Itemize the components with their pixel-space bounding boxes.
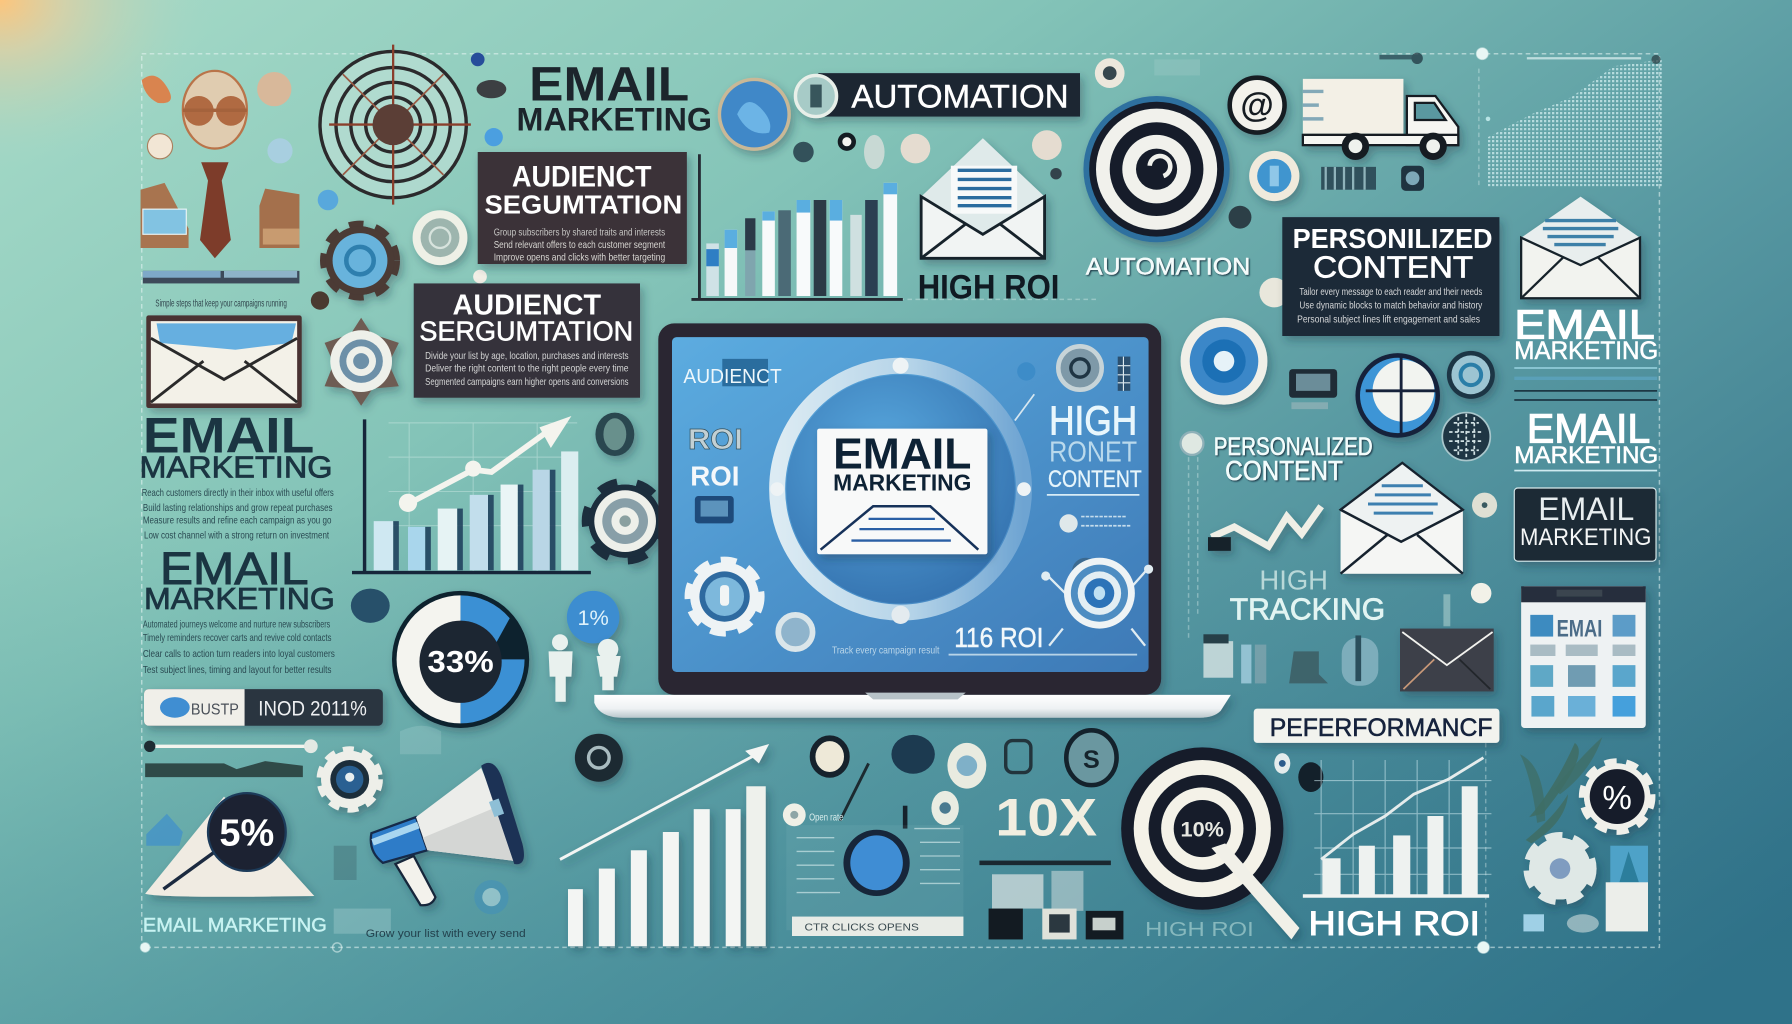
heading: email marketing left 1: EMAIL [143,407,314,464]
dashed frame [141,48,1659,953]
bar chart: growth left [352,416,591,573]
icon: big bullseye target [1083,96,1230,242]
text block: left description 2: Timely reminders recover carts and revive cold contacts [143,633,332,644]
icons: row above lens panel: S [1083,746,1100,774]
icon: businessman figure [141,71,299,258]
icon: plant leaves [1520,737,1602,843]
donut chart: 33 percent [392,591,529,728]
laptop base [594,695,1231,718]
icon: pale gear [1529,838,1591,899]
text block: left description 2: Test subject lines, timing and layout for better results [143,665,332,676]
icon: g ring [1447,351,1495,399]
screen: left labels: ROI [688,424,743,456]
panel: personalized content: Personal subject lines lift engagement and sales [1297,314,1480,325]
icons: dark square right of badge [1289,369,1337,409]
heading: email marketing top [517,59,712,137]
panel: audience segmentation 2: SERGUMTATION [419,316,633,347]
icon: brown gear badge [326,226,394,295]
icon: dark knob lower center [575,734,623,782]
label: high tracking [1230,565,1385,626]
screen: footer lines: Track every campaign result [832,646,940,657]
screen: roi text: 116 ROI [954,622,1043,653]
icons: small parts above envelope [793,58,1125,179]
icons: small decorations upper left [311,53,506,310]
icon: tall device [1443,594,1450,626]
panel: audience segmentation 1: SEGUMTATION [485,190,682,220]
heading: email marketing right 1: MARKETING [1514,337,1658,365]
icon: percent gear [1584,763,1650,830]
icon: dark gear right of chart [589,485,662,558]
heading: email marketing left 2 [144,543,335,616]
strip: left caption bar [143,271,299,309]
icon: small blue wave tag [146,814,183,846]
screen: left labels [683,359,782,523]
screen: right labels: RONET [1049,437,1137,469]
ghost label: high roi: HIGH ROI [1145,918,1254,941]
screen: left labels: ROI [690,461,739,492]
screen: pin marker [1017,362,1035,381]
screen: central ring [770,358,1031,624]
icon: gift box and blocks [1523,846,1648,933]
panel: audience segmentation 1 [478,152,687,264]
panel: audience segmentation 1: AUDIENCT [512,160,651,193]
card: email marketing: MARKETING [833,469,971,495]
calendar: email tiles: EMAI [1557,616,1602,643]
icon: blue percent badge [567,591,619,643]
icons: dots near line chart [1274,753,1323,792]
icons: pins near envelope [1471,493,1497,603]
icon: blue percent badge: 1% [577,605,609,630]
text block: left description 1 [142,488,334,541]
icons: white people figures [549,634,621,702]
text block: left description 1: Measure results and refine each campaign as you go [143,515,331,526]
screen: target icon [1041,558,1153,646]
card: email marketing: EMAIL [833,431,971,479]
panel: audience segmentation 1: Send relevant offers to each customer segment [494,240,665,251]
panel: lens report: CTR CLICKS OPENS [805,922,919,933]
laptop [594,323,1231,718]
panel: personalized content: PERSONILIZED [1293,223,1493,254]
pill: stat bar [144,689,383,726]
label: personalized content [1214,433,1373,486]
icon: spider web target [320,45,471,205]
banner: automation: AUTOMATION [851,78,1069,114]
panel: lens report [786,825,963,936]
donut chart: 33 percent: 33% [427,644,494,679]
icon: triangle envelope with 5 percent [145,793,314,897]
icon: percent gear: % [1602,780,1632,817]
icons: faint clusters near megaphone [334,726,509,934]
heading: email marketing left 2: EMAIL [160,543,309,594]
bar chart: bottom center [560,744,769,946]
icon: at sign badge [1230,78,1285,133]
text block: left description 1: Build lasting relationships and grow repeat purchases [143,503,333,514]
icon: delivery truck [1303,79,1458,160]
stat: 10x: 10X [995,788,1097,847]
pie icon: blue ring cross [1355,353,1440,438]
panel: personalized content: Use dynamic blocks to match behavior and history [1299,301,1482,312]
divider lines right [1514,368,1657,400]
panel: audience segmentation 1: Group subscribers by shared traits and interests [494,227,665,238]
banner: automation [795,73,1080,117]
heading: email marketing top: MARKETING [517,101,712,137]
label: high roi bottom: HIGH ROI [1309,905,1480,943]
screen: connector pin [1015,394,1034,421]
panel: email marketing dark: MARKETING [1520,524,1651,551]
screen: right labels: HIGH [1049,397,1137,443]
badge: blue ring right of laptop [1181,318,1267,405]
panel: audience segmentation 2: Deliver the right content to the right people every time [425,363,629,374]
heading: email marketing right 2: EMAIL [1527,405,1650,451]
label: personalized content: PERSONALIZED [1214,433,1373,461]
icon: envelope top right [1521,197,1640,298]
heading: email marketing right 2: MARKETING [1514,442,1658,469]
icon: dark orb left of donut [351,589,390,623]
icon: dark knob [595,413,634,456]
heading: email marketing right 1: EMAIL [1514,301,1655,347]
icon: silver seal [413,210,467,265]
card: email marketing [817,429,987,554]
label: automation small: AUTOMATION [1086,253,1250,280]
icon: triangle envelope with 5 percent: 5% [219,812,274,854]
line and bar chart: bottom right [1303,758,1491,896]
laptop screen [672,337,1149,672]
screen: left labels: AUDIENCT [683,365,782,388]
icons: row above lens panel [783,730,1117,829]
icon: globe [1442,413,1490,461]
panel: email marketing dark: EMAIL [1538,491,1634,527]
text block: left description 2: Clear calls to action turn readers into loyal customers [143,649,335,660]
icon: white gear [321,751,378,808]
small note bottom: Grow your list with every send [366,928,526,940]
icon: envelope center right [1341,463,1463,574]
icon: at sign badge: @ [1240,87,1274,125]
panel: audience segmentation 2 [414,283,640,398]
icon: envelope with letter top center [921,138,1045,258]
text block: left description 2 [143,619,335,676]
icons: pale tools row [1203,634,1378,686]
envelope left [146,315,302,408]
screen: gear icon [690,562,759,631]
icons: misc small near truck [1229,166,1424,307]
calendar: email tiles [1521,586,1646,728]
pill: performance: PEFERFORMANCF [1270,714,1493,742]
panel: audience segmentation 2: AUDIENCT [453,289,602,321]
screen: small ring [778,615,813,649]
text block: left description 1: Reach customers directly in their inbox with useful offers [142,488,334,499]
slider and strip [144,739,318,777]
label: high tracking: HIGH [1259,565,1328,596]
pill: stat bar: INOD 2011% [258,695,367,720]
screen: right labels: CONTENT [1048,466,1142,493]
text block: left description 2: Automated journeys welcome and nurture new subscribers [143,619,330,630]
heading: email marketing left 1: MARKETING [139,450,333,485]
panel: personalized content: CONTENT [1313,250,1473,285]
icon: dark envelope [1400,629,1494,691]
heading: email marketing top: EMAIL [529,59,689,112]
icon: zigzag arrow [1208,506,1321,551]
icon: bottom target with pointer: 10% [1181,817,1224,842]
icon: megaphone [371,763,524,905]
panel: personalized content [1282,217,1499,336]
screen: status lines [1059,514,1131,533]
label: high tracking: TRACKING [1230,591,1385,626]
strip: left caption bar: Simple steps that keep your campaigns running [155,298,287,309]
heading: email marketing left 1 [139,407,333,485]
panel: audience segmentation 1: Improve opens and clicks with better targeting [494,253,665,264]
pill: stat bar: BUSTP [191,701,239,718]
label: email marketing bottom left: EMAIL MARKETING [143,914,327,936]
bar chart: top [691,154,903,299]
icon: small pin dot [1181,432,1203,455]
icon: bottom target with pointer [1121,747,1299,939]
heading: email marketing right 1 [1514,301,1658,365]
panel: thumbnails [979,861,1123,939]
icon: blue circle badge [718,78,791,151]
icon: compass badge [325,318,399,406]
icons: faint top right bits [1154,53,1661,121]
panel: audience segmentation 2: Segmented campaigns earn higher opens and conversions [425,377,629,388]
icon: blue white button [1249,151,1299,201]
heading: email marketing right 2 [1514,405,1658,471]
screen: g icon and grid [1058,346,1130,391]
panel: personalized content: Tailor every message to each reader and their needs [1299,287,1482,298]
label: high roi top: HIGH ROI [918,268,1059,306]
screen: right labels [1047,397,1142,495]
label: personalized content: CONTENT [1225,455,1343,486]
panel: audience segmentation 2: Divide your list by age, location, purchases and interests [425,351,629,362]
icons: row above lens panel: Open rate [809,813,843,824]
heading: email marketing left 2: MARKETING [144,581,335,616]
text block: left description 1: Low cost channel with a strong return on investment [144,530,329,541]
area chart: dotted top right [1488,59,1662,186]
panel: email marketing dark [1514,488,1656,561]
